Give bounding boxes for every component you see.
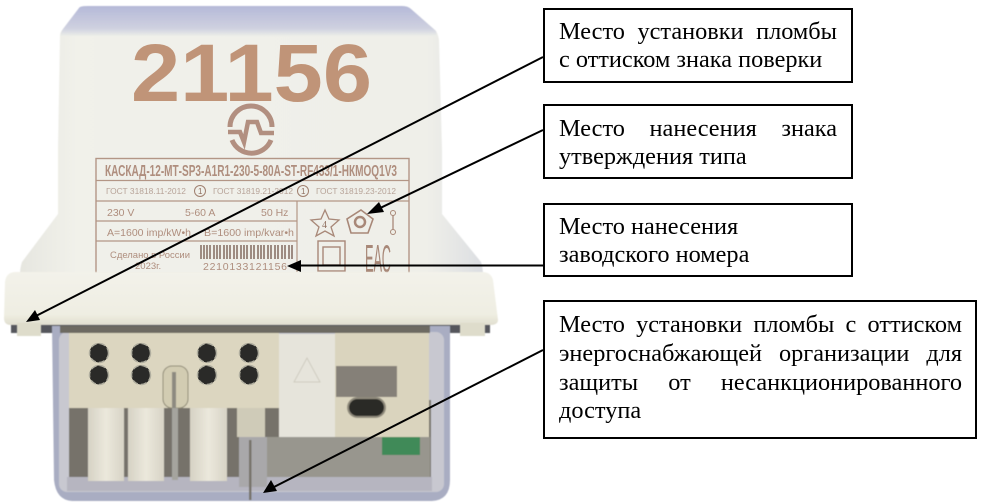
arrow to serial number bbox=[287, 260, 543, 272]
standards row: 1 bbox=[301, 187, 306, 196]
meter device bbox=[4, 6, 498, 501]
electrical ratings: 50 Hz bbox=[261, 207, 288, 219]
callout: utility seal: доступа bbox=[559, 397, 641, 424]
rating plate: ЕАС bbox=[365, 238, 391, 281]
electrical ratings: B=1600 imp/kvar•h bbox=[204, 227, 294, 239]
standards row: ГОСТ 31819.23-2012 bbox=[316, 186, 396, 196]
callout: serial number: Место нанесения bbox=[559, 213, 738, 240]
upper cover bbox=[20, 6, 483, 275]
accuracy class star bbox=[311, 210, 339, 236]
model designation: КАСКАД-12-МТ-SP3-A1R1-230-5-80А-ST-RF433/1-НКМОQ1V3 bbox=[105, 163, 397, 180]
standards row: 1 bbox=[198, 187, 203, 196]
lower transparent terminal cover bbox=[11, 323, 490, 501]
callout: utility seal: защиты от несанкционированного bbox=[559, 369, 962, 396]
type approval mark bbox=[347, 210, 373, 233]
link symbol bbox=[392, 213, 394, 232]
right module bbox=[335, 333, 429, 437]
callout: serial number: заводского номера bbox=[559, 241, 749, 268]
callout: verification seal: с оттиском знака поверки bbox=[559, 46, 822, 73]
electrical ratings: 230 V bbox=[107, 207, 134, 219]
wide flange bbox=[4, 272, 498, 336]
callout: serial number bbox=[543, 203, 853, 277]
green circuit board bbox=[382, 437, 420, 455]
barcode bbox=[201, 245, 292, 259]
electrical ratings: A=1600 imp/kW•h bbox=[107, 227, 191, 239]
arrow to verification seal bbox=[26, 57, 543, 322]
standards row bbox=[106, 186, 396, 196]
callout: utility seal: энергоснабжающей организации для bbox=[559, 340, 962, 367]
standards row: ГОСТ 31819.21-2012 bbox=[213, 186, 293, 196]
manufacturer logo bbox=[228, 106, 274, 153]
large number 21156: 21156 bbox=[131, 28, 372, 119]
callout: type approval mark: утверждения типа bbox=[559, 143, 747, 170]
double insulation square bbox=[318, 241, 345, 271]
screw terminals bbox=[90, 344, 258, 384]
accuracy class star: 4 bbox=[322, 220, 327, 231]
callout: verification seal bbox=[543, 8, 853, 83]
callout: verification seal: Место установки пломбы bbox=[559, 18, 837, 45]
electrical ratings: 2023г. bbox=[135, 261, 161, 272]
callout: type approval mark: Место нанесения знака bbox=[559, 115, 837, 142]
callout: utility seal bbox=[543, 300, 977, 439]
terminal block bbox=[69, 333, 279, 408]
rating plate bbox=[96, 158, 409, 281]
serial number: 2210133121156 bbox=[203, 261, 287, 273]
white fuse module bbox=[279, 334, 335, 437]
callout: utility seal: Место установки пломбы с оттиском bbox=[559, 311, 962, 338]
arrow to utility seal bbox=[263, 350, 543, 493]
cable columns bbox=[88, 405, 124, 481]
electrical ratings: 5-60 A bbox=[185, 207, 215, 219]
electrical ratings: Сделано в России bbox=[110, 250, 190, 261]
standards row: ГОСТ 31818.11-2012 bbox=[106, 186, 186, 196]
callout: type approval mark bbox=[543, 104, 853, 179]
electrical ratings bbox=[107, 207, 294, 272]
arrow to type approval mark bbox=[367, 130, 543, 214]
